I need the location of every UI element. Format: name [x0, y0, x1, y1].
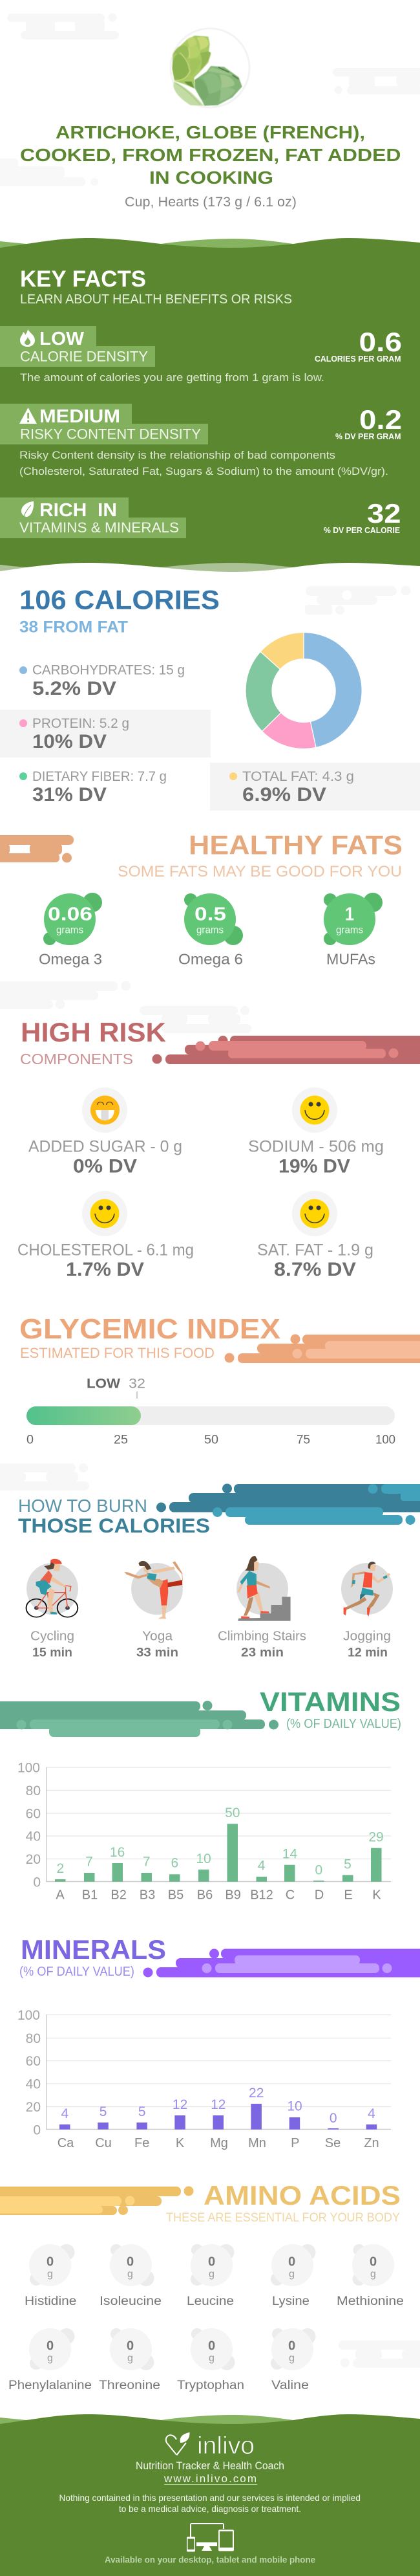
- heading: glycemic index: [19, 1313, 280, 1361]
- icon: grinning face: [90, 1096, 120, 1124]
- nutrient: carbohydrates: 5.2% DV: [32, 678, 116, 699]
- risk item: added sugar: 0% DV: [73, 1155, 137, 1177]
- background decoration: high risk clouds: [0, 981, 251, 1033]
- availability caption: Available on your desktop, tablet and mobile phone: [105, 2554, 315, 2564]
- bar chart: minerals: 20: [26, 2100, 41, 2115]
- heading: vitamins: (% OF DAILY VALUE): [286, 1717, 401, 1731]
- glycemic index gauge: LOW: [87, 1377, 120, 1391]
- fact: medium risky content density: (Cholesterol, Saturated Fat, Sugars & Sodium) to the amount (%DV/gr).: [19, 466, 388, 477]
- glycemic index gauge: 32: [129, 1377, 145, 1391]
- minerals decoration: [143, 1948, 420, 1977]
- fact: medium risky content density: Risky Content density is the relationship of bad components: [19, 450, 335, 461]
- disclaimer: [59, 2493, 361, 2514]
- exercise: jogging: Jogging: [343, 1629, 391, 1643]
- logo: inlivo: [166, 2432, 255, 2460]
- bar chart: vitamins: 0: [315, 1862, 322, 1877]
- heading: glycemic index: GLYCEMIC INDEX: [19, 1313, 280, 1345]
- fat badge: MUFAs: 1: [345, 904, 354, 925]
- title: COOKED, FROM FROZEN, FAT ADDED: [20, 145, 401, 165]
- amino acid: tryptophan: [177, 2328, 244, 2392]
- bar chart: minerals: 22: [249, 2086, 264, 2101]
- amino acid: histidine: g: [47, 2269, 53, 2280]
- amino acid: threonine: Threonine: [99, 2378, 160, 2392]
- glycemic index gauge: 100: [375, 1434, 395, 1446]
- bar chart: minerals: Mg: [210, 2136, 228, 2150]
- amino acid: tryptophan: 0: [208, 2339, 215, 2353]
- bar chart: vitamins: B1: [82, 1888, 98, 1902]
- icon: warning triangle: [19, 408, 37, 424]
- fat badge: MUFAs: MUFAs: [326, 951, 375, 968]
- nutrient: carbohydrates: CARBOHYDRATES: 15 g: [32, 662, 185, 678]
- nutrient: total fat: TOTAL FAT: 4.3 g: [242, 769, 354, 784]
- bar chart: minerals: 5: [138, 2104, 146, 2119]
- bar chart: minerals: 12: [173, 2097, 187, 2112]
- heading: healthy fats: SOME FATS MAY BE GOOD FOR YOU: [118, 863, 402, 880]
- risk item: saturated fat: SAT. FAT - 1.9 g: [257, 1241, 373, 1259]
- disclaimer: Nothing contained in this presentation and our services is intended or implied: [59, 2493, 361, 2503]
- bar chart: minerals: Zn: [364, 2136, 379, 2150]
- glycemic index decoration: [225, 1334, 420, 1363]
- bar chart: minerals: Se: [325, 2136, 341, 2150]
- heading: vitamins: VITAMINS: [260, 1686, 401, 1717]
- icon: smiling face: [90, 1199, 119, 1228]
- calories heading: 106 CALORIES: [19, 585, 220, 615]
- amino acids decoration: [0, 2187, 194, 2215]
- fat badge: omega 3: [39, 893, 102, 968]
- exercise: yoga: [125, 1561, 183, 1660]
- amino acid: lysine: g: [289, 2269, 295, 2280]
- fact: rich in vitamins and minerals: 32: [367, 498, 401, 529]
- amino acid: methionine: [337, 2244, 404, 2308]
- amino acid: phenylalanine: Phenylalanine: [8, 2378, 92, 2392]
- how to burn decoration: [156, 1484, 420, 1525]
- bar chart: vitamins: E: [344, 1888, 353, 1902]
- amino acid: valine: Valine: [271, 2378, 309, 2392]
- fact: low calorie density: 0.6: [359, 327, 402, 357]
- bar chart: minerals: P: [291, 2136, 299, 2150]
- title: IN COOKING: [149, 168, 273, 188]
- healthy fats decoration: [0, 835, 74, 863]
- fat badge: omega 3: grams: [56, 925, 83, 935]
- key facts heading: LEARN ABOUT HEALTH BENEFITS OR RISKS: [20, 292, 292, 307]
- heading: vitamins: [260, 1686, 401, 1731]
- fact: medium risky content density: RISKY CONTENT DENSITY: [20, 426, 201, 442]
- amino acid: valine: 0: [288, 2339, 295, 2353]
- bar chart: minerals: 60: [26, 2054, 41, 2069]
- amino acid: leucine: Leucine: [187, 2294, 234, 2308]
- exercise: jogging: 12 min: [348, 1646, 388, 1660]
- amino acid: histidine: 0: [47, 2255, 54, 2269]
- amino acid: threonine: 0: [127, 2339, 134, 2353]
- amino acid: phenylalanine: [8, 2328, 92, 2392]
- bar chart: minerals: 5: [100, 2104, 107, 2119]
- heading: how to burn those calories: THOSE CALORIES: [18, 1514, 210, 1537]
- bar chart: minerals: 80: [26, 2031, 41, 2046]
- bar chart: vitamins: B6: [197, 1888, 213, 1902]
- heading: amino acids: [166, 2180, 401, 2225]
- fact: low calorie density: LOW: [39, 329, 85, 349]
- fat badge: omega 3: Omega 3: [39, 951, 102, 968]
- amino acid: phenylalanine: 0: [47, 2339, 54, 2353]
- amino acid: histidine: [25, 2244, 76, 2308]
- background decoration: top right cloud: [333, 68, 420, 94]
- bar chart: minerals: Mn: [248, 2136, 266, 2150]
- title: [20, 122, 401, 188]
- bar chart: minerals: Fe: [134, 2136, 149, 2150]
- bar chart: vitamins: 4: [258, 1859, 266, 1873]
- bar chart: vitamins: D: [315, 1888, 324, 1902]
- fact: rich in vitamins and minerals: [0, 497, 401, 538]
- exercise: climbing stairs: Climbing Stairs: [218, 1629, 306, 1643]
- risk item: sodium: 19% DV: [278, 1155, 350, 1177]
- amino acid: phenylalanine: g: [47, 2353, 53, 2364]
- calories heading: 38 FROM FAT: [19, 618, 128, 637]
- heading: healthy fats: HEALTHY FATS: [189, 829, 403, 860]
- amino acid: threonine: [99, 2328, 160, 2392]
- fact: medium risky content density: MEDIUM: [39, 406, 120, 427]
- fact: low calorie density: [0, 326, 402, 384]
- calories heading: [19, 585, 220, 637]
- risk item: saturated fat: 8.7% DV: [274, 1259, 356, 1280]
- bar chart: minerals: [17, 2008, 391, 2150]
- disclaimer: to be a medical advice, diagnosis or treatment.: [119, 2504, 301, 2514]
- exercise: cycling: 15 min: [32, 1646, 72, 1660]
- nutrient: total fat: 6.9% DV: [242, 784, 326, 805]
- amino acid: methionine: 0: [370, 2255, 377, 2269]
- fat badge: omega 6: 0.5: [194, 904, 226, 925]
- nutrient: dietary fiber: 31% DV: [32, 784, 107, 805]
- heading: minerals: (% OF DAILY VALUE): [19, 1965, 134, 1979]
- footer website link: www.inlivo.com: [163, 2472, 257, 2485]
- amino acid: methionine: g: [370, 2269, 376, 2280]
- risk item: added sugar: [28, 1087, 182, 1177]
- bar chart: vitamins: B9: [225, 1888, 241, 1902]
- fat badge: omega 6: grams: [196, 925, 224, 935]
- background decoration: burn cloud: [0, 1463, 89, 1490]
- risk item: saturated fat: [257, 1191, 373, 1280]
- bar chart: vitamins: A: [56, 1888, 65, 1902]
- donut chart: calorie sources: [246, 632, 362, 749]
- bar chart: minerals: 100: [17, 2008, 40, 2023]
- bar chart: vitamins: 40: [26, 1829, 41, 1844]
- fact: medium risky content density: % DV PER GRAM: [335, 431, 401, 441]
- amino acid: threonine: g: [127, 2353, 133, 2364]
- bar chart: minerals: K: [176, 2136, 185, 2150]
- bar chart: vitamins: 5: [344, 1857, 352, 1872]
- footer tagline: Nutrition Tracker & Health Coach: [136, 2460, 284, 2472]
- bar chart: vitamins: 10: [196, 1851, 211, 1866]
- fact: rich in vitamins and minerals: % DV PER CALORIE: [324, 525, 400, 535]
- bar chart: vitamins: 7: [85, 1854, 93, 1869]
- bar chart: vitamins: B5: [168, 1888, 184, 1902]
- risk item: added sugar: ADDED SUGAR - 0 g: [28, 1137, 182, 1155]
- heading: high risk components: HIGH RISK: [21, 1017, 166, 1047]
- fact: medium risky content density: 0.2: [359, 404, 402, 435]
- high risk decoration: [152, 1036, 420, 1064]
- amino acid: valine: [271, 2328, 315, 2392]
- glycemic index gauge: 25: [114, 1434, 128, 1446]
- bar chart: minerals: Cu: [95, 2136, 112, 2150]
- bar chart: vitamins: 2: [56, 1861, 64, 1876]
- nutrient: protein: PROTEIN: 5.2 g: [32, 716, 129, 731]
- exercise: yoga: 33 min: [136, 1646, 178, 1660]
- nutrient: protein: 10% DV: [32, 731, 107, 752]
- icon: runner: [344, 1562, 390, 1617]
- background decoration: top left cloud: [7, 13, 119, 39]
- heading: glycemic index: ESTIMATED FOR THIS FOOD: [20, 1345, 215, 1361]
- bar chart: vitamins: B2: [110, 1888, 127, 1902]
- icon: smiling face: [300, 1096, 330, 1124]
- exercise: jogging: [341, 1562, 393, 1660]
- panel: footer: [0, 2414, 420, 2576]
- bar chart: vitamins: 7: [143, 1854, 151, 1869]
- amino acid: isoleucine: g: [127, 2269, 133, 2280]
- risk item: sodium: [248, 1087, 384, 1177]
- exercise: climbing stairs: [218, 1556, 306, 1660]
- amino acid: histidine: Histidine: [25, 2294, 76, 2308]
- logo: inlivo: inlivo: [197, 2432, 255, 2460]
- amino acid: leucine: [187, 2244, 234, 2308]
- fact: low calorie density: CALORIES PER GRAM: [315, 354, 401, 364]
- glycemic index gauge: [26, 1377, 395, 1446]
- bar chart: vitamins: 60: [26, 1806, 41, 1822]
- fat badge: omega 6: [178, 893, 243, 968]
- amino acid: methionine: Methionine: [337, 2294, 404, 2308]
- heading: healthy fats: [118, 829, 403, 880]
- bar chart: vitamins: B12: [250, 1888, 273, 1902]
- heading: high risk components: [20, 1017, 166, 1067]
- background decoration: left cloud beside title: [0, 158, 98, 186]
- bar chart: vitamins: 14: [282, 1847, 297, 1862]
- bar chart: minerals: 10: [287, 2099, 302, 2114]
- exercise: yoga: Yoga: [142, 1629, 173, 1643]
- nutrient: total fat: [210, 763, 420, 811]
- icon: leaf: [21, 501, 34, 517]
- fact: rich in vitamins and minerals: VITAMINS & MINERALS: [19, 519, 179, 536]
- heading: amino acids: AMINO ACIDS: [204, 2180, 401, 2210]
- bar chart: vitamins: 6: [171, 1856, 178, 1871]
- serving size subtitle: Cup, Hearts (173 g / 6.1 oz): [125, 195, 297, 210]
- icon: desktop, tablet and phone: [187, 2523, 234, 2551]
- icon: stair climber: [237, 1556, 291, 1621]
- fat badge: MUFAs: [324, 893, 383, 968]
- glycemic index gauge: 50: [204, 1434, 218, 1446]
- bar chart: vitamins: 100: [17, 1761, 40, 1775]
- amino acid: isoleucine: Isoleucine: [100, 2294, 162, 2308]
- bar chart: minerals: 4: [368, 2106, 375, 2121]
- exercise: cycling: [26, 1559, 78, 1660]
- bar chart: minerals: 4: [61, 2106, 68, 2121]
- heading: how to burn those calories: HOW TO BURN: [18, 1496, 147, 1516]
- bar chart: vitamins: K: [372, 1888, 381, 1902]
- background decoration: calories cloud: [305, 586, 411, 615]
- heading: minerals: [19, 1934, 166, 1979]
- heading: minerals: MINERALS: [21, 1934, 166, 1965]
- background decoration: amino cloud: [339, 2341, 420, 2368]
- fat badge: omega 6: Omega 6: [178, 951, 243, 968]
- bar chart: minerals: 40: [26, 2077, 41, 2092]
- bar chart: minerals: 0: [33, 2123, 41, 2137]
- amino acid: lysine: Lysine: [272, 2294, 310, 2308]
- amino acid: leucine: g: [209, 2269, 215, 2280]
- fact: low calorie density: The amount of calories you are getting from 1 gram is low.: [20, 372, 324, 384]
- bar chart: vitamins: C: [286, 1888, 295, 1902]
- bar chart: minerals: 0: [330, 2111, 337, 2126]
- amino acid: leucine: 0: [208, 2255, 215, 2269]
- nutrient: carbohydrates: [19, 662, 185, 699]
- amino acid: lysine: 0: [288, 2255, 295, 2269]
- amino acid: isoleucine: [100, 2244, 162, 2308]
- bar chart: vitamins: [17, 1761, 391, 1902]
- nutrient: protein: [0, 710, 211, 758]
- amino acid: lysine: [271, 2244, 315, 2308]
- nutrient: dietary fiber: DIETARY FIBER: 7.7 g: [32, 769, 167, 784]
- bar chart: vitamins: 80: [26, 1784, 41, 1798]
- icon: yoga pose: [125, 1561, 183, 1619]
- vitamins decoration: [0, 1701, 278, 1737]
- amino acid: isoleucine: 0: [127, 2255, 134, 2269]
- key facts heading: KEY FACTS: [20, 267, 146, 292]
- risk item: cholesterol: [17, 1191, 194, 1280]
- fact: rich in vitamins and minerals: RICH IN: [39, 500, 117, 521]
- bar chart: vitamins: 16: [110, 1845, 125, 1860]
- glycemic index gauge: 0: [26, 1434, 34, 1446]
- amino acid: tryptophan: g: [209, 2353, 215, 2364]
- title: ARTICHOKE, GLOBE (FRENCH),: [56, 122, 365, 142]
- exercise: cycling: Cycling: [30, 1629, 74, 1643]
- risk item: cholesterol: CHOLESTEROL - 6.1 mg: [17, 1241, 194, 1259]
- bar chart: vitamins: B3: [140, 1888, 155, 1902]
- bar chart: minerals: 12: [211, 2097, 226, 2112]
- amino acid: valine: g: [289, 2353, 295, 2364]
- bar chart: vitamins: 50: [225, 1806, 240, 1820]
- panel: key facts: [0, 238, 420, 572]
- heading: how to burn those calories: [18, 1496, 210, 1537]
- bar chart: vitamins: 0: [33, 1875, 41, 1890]
- bar chart: vitamins: 20: [26, 1852, 41, 1867]
- glycemic index gauge: 75: [297, 1434, 310, 1446]
- exercise: climbing stairs: 23 min: [241, 1646, 284, 1660]
- fact: medium risky content density: [0, 404, 402, 477]
- fact: low calorie density: CALORIE DENSITY: [20, 348, 148, 365]
- amino acid: tryptophan: Tryptophan: [177, 2378, 244, 2392]
- risk item: cholesterol: 1.7% DV: [66, 1259, 144, 1280]
- bar chart: vitamins: 29: [368, 1830, 384, 1845]
- heading: amino acids: THESE ARE ESSENTIAL FOR YOUR BODY: [166, 2211, 400, 2225]
- icon: flame: [20, 329, 35, 347]
- icon: cyclist: [26, 1559, 78, 1617]
- key facts heading: [20, 267, 292, 307]
- icon: smiling face: [300, 1199, 330, 1228]
- risk item: sodium: SODIUM - 506 mg: [248, 1137, 384, 1155]
- nutrient: dietary fiber: [19, 769, 167, 805]
- bar chart: minerals: Ca: [58, 2136, 74, 2150]
- food photo: artichoke in ring: [171, 28, 249, 107]
- fat badge: MUFAs: grams: [336, 925, 363, 935]
- heading: high risk components: COMPONENTS: [20, 1051, 133, 1067]
- fat badge: omega 3: 0.06: [48, 904, 92, 925]
